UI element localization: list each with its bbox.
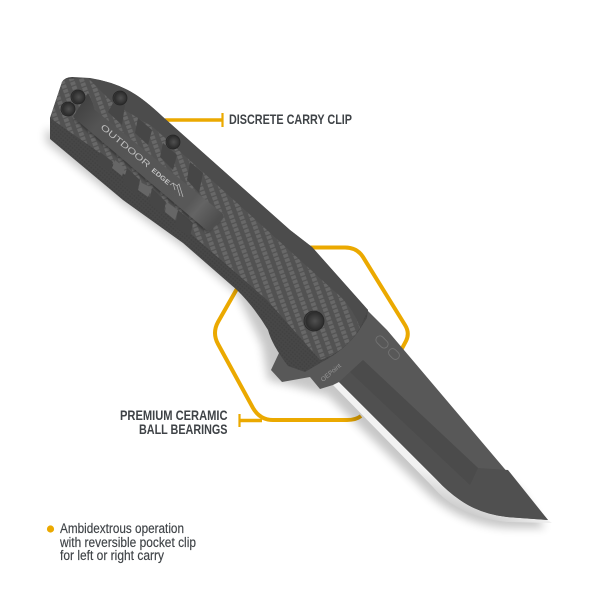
blade dark bevel: [339, 360, 548, 520]
hexagon callout outline: [215, 248, 408, 420]
blade stamp: model name: OEPoint: [320, 362, 343, 384]
pocket clip: [73, 93, 224, 231]
label: premium ceramic ball bearings: BALL BEARINGS: [139, 421, 228, 437]
blade: [271, 305, 548, 520]
label: premium ceramic ball bearings: [120, 407, 228, 437]
knife drop shadow: [46, 128, 545, 528]
grip slots lighter: [112, 160, 178, 220]
knife: [50, 77, 552, 523]
screws: [61, 90, 324, 331]
blade fuller band: [350, 360, 478, 485]
carbon fibre panel: [50, 78, 360, 360]
label: premium ceramic ball bearings: PREMIUM CERAMIC: [120, 407, 228, 423]
grip slots: [97, 103, 203, 237]
handle upper band: [88, 78, 368, 328]
label: discrete carry clip: DISCRETE CARRY CLIP: [229, 111, 352, 127]
bullet text: Ambidextrous operation: [60, 521, 184, 536]
bullet text: for left or right carry: [60, 548, 164, 563]
bullet text: with reversible pocket clip: [59, 535, 196, 550]
clip logo: EDGE: EDGE: [150, 167, 172, 187]
clip logo: OUTDOOR: OUTDOOR: [99, 122, 153, 169]
clip logo: mountains: [170, 183, 183, 197]
bullet text: [59, 521, 196, 563]
handle: [50, 77, 368, 372]
blade edge: [333, 380, 552, 523]
leader: carry clip: [165, 113, 222, 127]
leader: ceramic ball bearings: [240, 414, 262, 427]
clip shadow: [73, 118, 222, 233]
blade stamps: [374, 334, 401, 361]
bullet dot: [47, 525, 54, 533]
